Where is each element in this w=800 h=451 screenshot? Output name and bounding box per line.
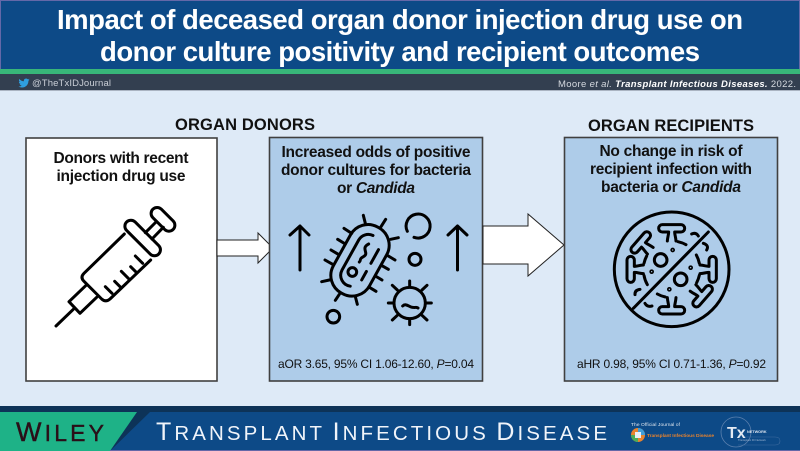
icon: twitter bird [18,79,30,88]
society name: Transplant Infectious Disease [647,433,714,439]
title: Impact of deceased organ donor injection drug use on [57,4,743,35]
icon: up arrow right [448,226,467,270]
panel text: or Candida [337,180,415,197]
title: donor culture positivity and recipient outcomes [100,36,700,67]
arrow: cultures to recipients [483,214,564,276]
header banner [0,0,800,91]
icon: crossed-out virus [614,212,729,327]
footer banner [0,406,800,451]
panel text: bacteria or Candida [601,179,741,196]
society logo [631,428,714,442]
statistic: aHR 0.98, 95% CI 0.71-1.36, P=0.92 [577,357,766,371]
Tx network logo: NETWORK [747,430,767,434]
heading: organ recipients: ORGAN RECIPIENTS [588,117,754,135]
Tx network logo: Transplant ID Network [738,438,766,442]
panel text [590,143,752,196]
publisher logo: Wiley: WILEY [16,417,104,447]
heading: organ donors: ORGAN DONORS [175,116,315,134]
panel text: injection drug use [56,168,186,185]
title [57,4,743,67]
arrow: donors to cultures [217,233,273,263]
panel text: Increased odds of positive [282,144,471,161]
citation: Moore et al. Transplant Infectious Diseases. 2022. [558,79,796,90]
icon: bacteria [322,214,431,325]
panel: donors with recent injection drug use [26,138,217,381]
statistic: aOR 3.65, 95% CI 1.06-12.60, P=0.04 [278,357,474,371]
journal name: TRANSPLANT INFECTIOUS DISEASE [156,418,607,446]
panel text: donor cultures for bacteria [281,162,471,179]
panel text: No change in risk of [600,143,743,160]
panel text: recipient infection with [590,161,752,178]
panel text [54,150,188,185]
icon: up arrow left [290,226,309,270]
Tx network logo: Tx [727,425,746,442]
panel text: Donors with recent [54,150,188,167]
panel: increased odds of positive donor cultures [270,138,482,381]
panel text [281,144,471,197]
Tx network logo [721,417,780,447]
twitter handle: @TheTxIDJournal [32,78,111,89]
icon: syringe [56,205,177,326]
official journal label: The Official Journal of [631,422,681,428]
panel: no change in risk of recipient infection [564,138,778,381]
